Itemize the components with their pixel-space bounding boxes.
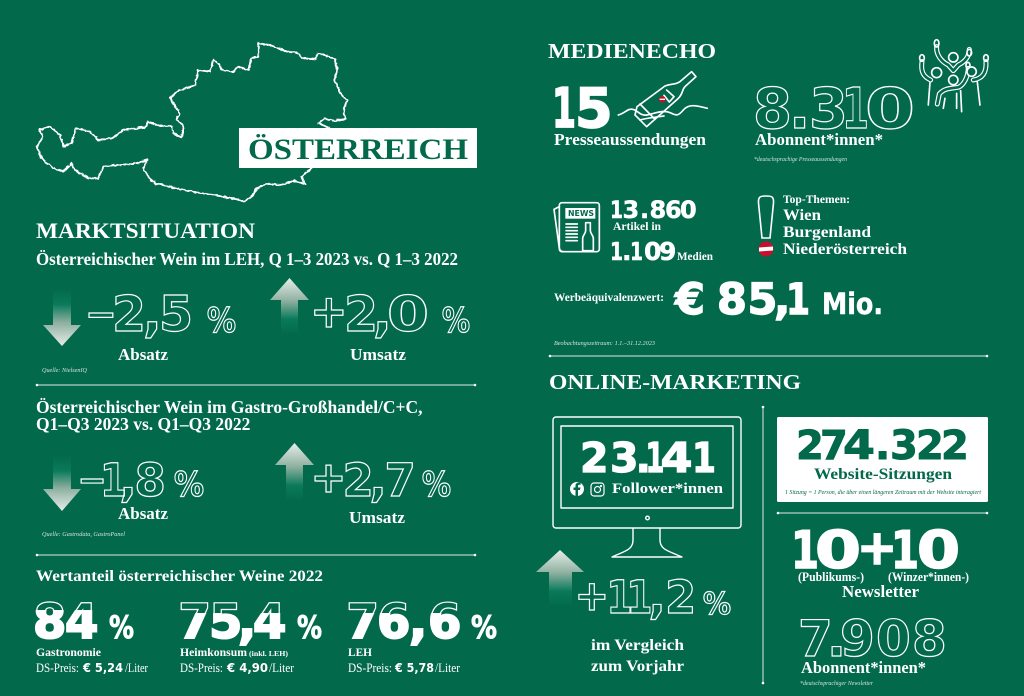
value: +2,0 %: , — [373, 286, 392, 343]
panel: Wertanteil — [33, 568, 497, 675]
value: -2,5 %: − — [85, 292, 117, 336]
source note: Quelle: NielsenIQ — [42, 367, 87, 374]
value: +2,0 %: 0 — [387, 286, 429, 343]
value: +2,7 %: 2,7 — [342, 454, 416, 507]
stat: LEH 76,6 %: /Liter — [435, 661, 461, 675]
value: -1,8 %: − — [78, 461, 107, 501]
stat: Heimkonsum 75,4 %: Heimkonsum — [180, 645, 247, 659]
icon: exclamation mark — [758, 196, 774, 256]
stat: 85,1 Mio.: , — [774, 275, 790, 325]
stat: Heimkonsum 75,4 %: 75,4 — [178, 594, 286, 650]
card: Website-Sitzungen: 7 — [820, 423, 848, 469]
stat: 8.310: 8 — [753, 77, 792, 142]
value: -2,5 %: % — [207, 301, 236, 341]
label: im Vergleich zum Vorjahr: im Vergleich — [591, 637, 684, 654]
value: -1,8 %: % — [174, 465, 204, 505]
subheading: Gastro-Großhandel: Q1–Q3 2023 vs. Q1–Q3 2022 — [36, 414, 250, 434]
stat: 23.141: 4 — [660, 434, 692, 482]
value: -1,8 %: 8 — [134, 454, 166, 507]
panel: Online-Marketing — [536, 370, 988, 687]
source note: Quelle: Gastrodata, GastroPanel — [42, 531, 125, 538]
stat: Heimkonsum 75,4 %: (inkl. LEH) — [249, 649, 289, 658]
stat: 23.141: 2 — [580, 434, 609, 482]
heading: Wertanteil: Wertanteil österreichischer Weine 2022 — [36, 568, 323, 585]
stat: 13.860: 6 — [665, 196, 682, 224]
value: +11,2 %: 1 — [626, 571, 652, 624]
stat: Heimkonsum 75,4 %: 75,4 — [178, 594, 286, 650]
title label: Österreich: ÖSTERREICH — [248, 133, 468, 166]
value: +2,0 % — [310, 285, 470, 343]
value: +11,2 %: 1 — [606, 571, 632, 624]
stat: 1.109: 0 — [644, 237, 661, 266]
value: +2,0 %: % — [442, 301, 470, 341]
card: Website-Sitzungen: 4 — [843, 423, 875, 469]
stat: 1.109: . — [622, 237, 632, 266]
stat: Heimkonsum 75,4 % — [180, 602, 322, 674]
heading: Medienecho: MEDIENECHO — [548, 39, 716, 63]
value: +2,7 %: % — [422, 465, 451, 505]
stat: Heimkonsum 75,4 %: € 4,90 — [226, 660, 268, 675]
stat: Heimkonsum 75,4 %: DS-Preis: — [180, 661, 223, 675]
heading: Marktsituation: MARKTSITUATION — [36, 218, 255, 243]
value: +11,2 %: 2 — [665, 571, 696, 624]
value: -2,5 % — [85, 286, 236, 343]
icon: up arrow LEH Umsatz — [270, 278, 309, 335]
card: Website-Sitzungen: . — [875, 423, 890, 469]
text block: Top-Themen — [783, 194, 907, 258]
stat: 23.141: 3 — [610, 434, 639, 482]
stat: LEH 76,6 %: DS-Preis: — [348, 661, 392, 675]
label: Medien: Medien — [677, 251, 714, 263]
value: +11,2 % — [574, 571, 731, 624]
title label: Österreich — [239, 128, 477, 168]
value: +2,7 %: + — [310, 453, 347, 503]
text block: Top-Themen: Top-Themen: — [783, 194, 850, 206]
value: -1,8 %: , — [120, 454, 137, 507]
icon: newspaper — [554, 203, 599, 252]
card: Website-Sitzungen: Website-Sitzungen — [814, 466, 952, 483]
icon: up arrow followers — [536, 550, 584, 607]
footnote: Beobachtungszeitraum: Beobachtungszeitraum: 1.1.–31.12.2023 — [554, 340, 656, 347]
stat: LEH 76,6 %: LEH — [348, 645, 373, 659]
stat: 13.860: 3 — [622, 196, 639, 224]
stat: 8.310: . — [789, 77, 810, 142]
stat: 15: 5 — [575, 77, 613, 140]
stat: 13.860: 8 — [650, 196, 666, 224]
stat: LEH 76,6 % — [348, 602, 497, 674]
stat: 10+10: 1 — [791, 521, 819, 581]
text block: Top-Themen: Wien — [783, 207, 821, 224]
value: +11,2 %: + — [574, 571, 609, 620]
stat: 85,1 Mio.: 5 — [748, 275, 777, 325]
stat: Gastronomie 84 %: /Liter — [125, 661, 149, 675]
value: +2,0 %: 2 — [344, 286, 378, 343]
stat: 23.141: . — [636, 434, 651, 482]
stat: 13.860: 1 — [610, 196, 623, 224]
stat: Gastronomie 84 %: € 5,24 — [82, 660, 123, 675]
stat: 1.109: 9 — [659, 237, 676, 266]
value: -1,8 %: 1 — [100, 454, 127, 507]
stat: LEH 76,6 %: 76,6 — [346, 594, 461, 650]
icon: Facebook — [570, 482, 584, 496]
stat: 15: 1 — [552, 77, 576, 140]
card: Website-Sitzungen: 2 — [916, 423, 944, 469]
card: Website-Sitzungen: 2 — [941, 423, 969, 469]
stat: 85,1 Mio. — [674, 275, 883, 325]
text block: Top-Themen: Niederösterreich — [783, 241, 907, 258]
value: +11,2 %: % — [703, 587, 731, 622]
icon: down arrow Gastro Absatz — [43, 455, 81, 511]
label: Publikums: (Publikums-) — [798, 569, 864, 584]
stat: 13.860: 0 — [680, 196, 697, 224]
label: Abonnent*innen: Abonnent*innen* — [801, 658, 926, 677]
icon: message in a bottle — [618, 72, 707, 127]
stat: Heimkonsum 75,4 %: /Liter — [269, 661, 295, 675]
stat: 10+10: 0 — [917, 521, 960, 581]
stat: 23.141: 1 — [646, 434, 664, 482]
stat: 85,1 Mio.: 8 — [717, 275, 747, 325]
label: Presseaussendungen: Presseaussendungen — [554, 130, 706, 149]
stat: 13.860: . — [640, 196, 649, 224]
value: +2,7 % — [310, 453, 451, 507]
card: Website-Sitzungen: 1 Sitzung = 1 Person, die über einen längeren Zeitraum mit der Website interagiert — [785, 489, 981, 496]
footnote: *deutschsprachiger Newsletter — [800, 680, 873, 687]
stat: Gastronomie 84 %: % — [109, 610, 134, 646]
card: Website-Sitzungen — [777, 417, 988, 502]
value: -1,8 % — [78, 454, 204, 507]
stat: LEH 76,6 %: € 5,78 — [394, 660, 434, 675]
stat: 10+10: 0 — [815, 521, 861, 581]
stat: Heimkonsum 75,4 %: % — [297, 610, 322, 646]
subheading: Gastro-Großhandel: Österreichischer Wein im Gastro-Großhandel/C+C, — [36, 397, 423, 417]
label: im Vergleich zum Vorjahr — [591, 637, 684, 675]
value: +11,2 %: , — [648, 571, 666, 624]
stat: 1.109: 1 — [610, 237, 623, 266]
stat: Gastronomie 84 %: DS-Preis: — [36, 661, 79, 675]
heading: Online-Marketing: ONLINE-MARKETING — [549, 370, 801, 394]
label: Follower*innen: Follower*innen — [612, 481, 724, 497]
subheading: LEH: Österreichischer Wein im LEH, Q 1–3 2023 vs. Q 1–3 2022 — [36, 249, 458, 269]
stat: 23.141: 1 — [692, 434, 716, 482]
stat: 85,1 Mio.: € — [674, 275, 705, 325]
panel: Medienecho — [548, 39, 988, 357]
label: Artikel in: Artikel in — [613, 221, 662, 233]
value: +2,0 %: + — [310, 285, 348, 338]
label: Umsatz: Umsatz — [350, 345, 406, 364]
map outline of Austria — [37, 43, 347, 202]
icon: up arrow Gastro Umsatz — [275, 443, 314, 502]
icon: monitor — [553, 417, 741, 557]
label: Werbeäquivalenzwert: Werbeäquivalenzwert: — [554, 290, 664, 304]
card: Website-Sitzungen: 2 — [796, 423, 824, 469]
card: Website-Sitzungen: 3 — [890, 423, 918, 469]
label: Winzer*innen: (Winzer*innen-) — [888, 569, 969, 584]
label: im Vergleich zum Vorjahr: zum Vorjahr — [591, 658, 684, 675]
stat: 1.109: 1 — [630, 237, 643, 266]
stat: Gastronomie 84 %: 84 — [33, 594, 98, 650]
label: Abonnent*innen: Abonnent*innen* — [755, 130, 883, 149]
stat: 8.310: 3 — [809, 77, 848, 142]
label: Newsletter: Newsletter — [842, 582, 919, 601]
label: Absatz: Absatz — [118, 345, 168, 364]
stat: Gastronomie 84 % — [34, 601, 148, 674]
stat: LEH 76,6 %: % — [471, 610, 497, 646]
stat: 8.310: 0 — [865, 77, 915, 142]
label: Umsatz: Umsatz — [349, 508, 405, 527]
stat: Gastronomie 84 %: 84 — [33, 594, 98, 650]
label: Absatz: Absatz — [118, 504, 168, 523]
value: -2,5 %: 2,5 — [112, 286, 193, 343]
stat: 10+10: + — [857, 520, 897, 576]
stat: 8.310: 1 — [842, 77, 869, 142]
stat: 10+10: 1 — [891, 521, 919, 581]
footnote: *deutschsprachige Presseaussendungen — [754, 156, 847, 163]
stat: 10+10 — [791, 520, 960, 581]
stat: 85,1 Mio.: Mio. — [822, 287, 883, 321]
stat: Gastronomie 84 %: Gastronomie — [36, 645, 102, 659]
newspaper label: NEWS: NEWS — [568, 209, 594, 218]
icon: down arrow LEH Absatz — [43, 288, 81, 346]
panel: Marktsituation — [36, 218, 476, 556]
panel: Österreich map header — [37, 43, 477, 202]
icon: cheering people — [920, 40, 988, 112]
icon: Instagram — [591, 483, 604, 496]
text block: Top-Themen: Burgenland — [783, 224, 871, 241]
stat: 85,1 Mio.: 1 — [786, 275, 810, 325]
stat: LEH 76,6 %: 76,6 — [346, 594, 461, 650]
stat: 7.908: 7.908 — [798, 610, 947, 668]
